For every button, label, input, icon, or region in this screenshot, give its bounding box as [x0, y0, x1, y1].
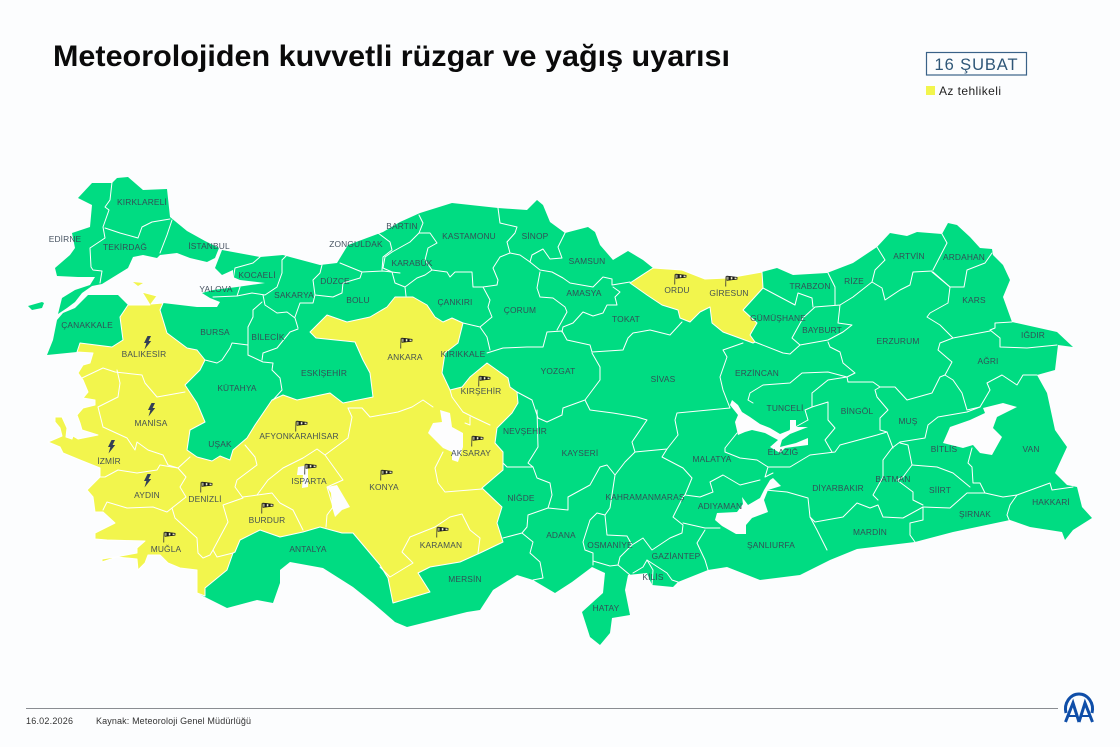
province name labels: HAKKARİ	[1032, 497, 1070, 507]
icon: wind Isparta	[304, 464, 316, 474]
province name labels: TUNCELİ	[767, 403, 803, 413]
province name labels: SİNOP	[522, 231, 549, 241]
region: Thrace	[55, 177, 219, 314]
icon: wind Giresun	[725, 276, 737, 286]
province name labels: ÇANKIRI	[437, 297, 473, 307]
province name labels: BİLECİK	[251, 332, 285, 342]
province name labels: VAN	[1022, 444, 1040, 454]
icon: wind Afyonkarahisar	[295, 421, 307, 432]
province name labels: YALOVA	[199, 284, 233, 294]
region: Ordu and Giresun	[630, 268, 763, 343]
province name labels: ADIYAMAN	[698, 501, 742, 511]
province name labels	[49, 197, 1070, 613]
province name labels: TOKAT	[612, 314, 640, 324]
province borders	[82, 182, 1073, 585]
province name labels: KARABÜK	[391, 258, 433, 268]
lake: Eğirdir	[297, 465, 308, 488]
province name labels: MANİSA	[134, 418, 168, 428]
province name labels: AĞRI	[977, 356, 999, 366]
province name labels: ŞANLIURFA	[747, 540, 795, 550]
province name labels: GAZİANTEP	[652, 551, 701, 561]
province name labels: SAMSUN	[569, 256, 605, 266]
map: Turkey provinces	[28, 177, 1092, 645]
province name labels: KİLİS	[642, 572, 664, 582]
date badge	[926, 52, 1026, 75]
province name labels: ANKARA	[387, 352, 423, 362]
lake: Atatürk	[715, 478, 781, 534]
province name labels: TRABZON	[789, 281, 831, 291]
province name labels: BOLU	[346, 295, 370, 305]
icon: lightning Balıkesir	[144, 336, 151, 350]
lake: Van	[943, 403, 1017, 455]
province name labels: İSTANBUL	[188, 241, 230, 251]
province name labels: ŞIRNAK	[959, 509, 991, 519]
province name labels: RİZE	[844, 276, 864, 286]
province name labels: UŞAK	[208, 439, 232, 449]
province name labels: KIRIKKALE	[441, 349, 486, 359]
footer date: 16.02.2026	[26, 716, 73, 726]
province name labels: MALATYA	[693, 454, 732, 464]
province name labels: ÇORUM	[504, 305, 536, 315]
province name labels: DİYARBAKIR	[812, 483, 864, 493]
province name labels: SAKARYA	[274, 290, 314, 300]
lakes	[297, 400, 1017, 534]
province name labels: ARTVİN	[893, 251, 925, 261]
province name labels: BAYBURT	[802, 325, 842, 335]
province name labels: GÜMÜŞHANE	[750, 313, 806, 323]
province name labels: BATMAN	[875, 474, 911, 484]
province name labels: MUĞLA	[151, 544, 182, 554]
province name labels: KARAMAN	[420, 540, 462, 550]
province name labels: İZMİR	[97, 456, 121, 466]
province name labels: AYDIN	[134, 490, 160, 500]
province name labels: KONYA	[369, 482, 399, 492]
province name labels: AKSARAY	[451, 448, 491, 458]
province name labels: ORDU	[664, 285, 690, 295]
province name labels: ERZURUM	[877, 336, 919, 346]
province name labels: MARDİN	[853, 527, 887, 537]
province name labels: NİĞDE	[507, 493, 535, 503]
province name labels: KARS	[962, 295, 986, 305]
province name labels: DENİZLİ	[188, 494, 222, 504]
province name labels: BALIKESİR	[122, 349, 166, 359]
province name labels: ISPARTA	[291, 476, 327, 486]
province name labels: KOCAELİ	[238, 270, 276, 280]
province name labels: KIRŞEHİR	[461, 386, 501, 396]
icon: lightning Manisa	[148, 403, 155, 416]
province name labels: KAHRAMANMARAŞ	[605, 492, 685, 502]
province name labels: SİVAS	[651, 374, 676, 384]
icon: wind Muğla	[163, 532, 175, 542]
province name labels: EDİRNE	[49, 234, 82, 244]
province name labels: AFYONKARAHİSAR	[259, 431, 339, 441]
legend: Az tehlikeli	[939, 84, 1001, 98]
province name labels: ARDAHAN	[943, 252, 985, 262]
icon: wind Aksaray	[471, 436, 483, 446]
province name labels: BURSA	[200, 327, 230, 337]
province name labels: BİTLİS	[931, 444, 958, 454]
island: Gökçeada	[28, 302, 44, 310]
province name labels: BİNGÖL	[841, 406, 873, 416]
icon: wind Denizli	[200, 482, 212, 492]
icon: wind Kırşehir	[478, 376, 490, 386]
wind icons	[163, 274, 737, 542]
lake: Beyşehir	[327, 485, 350, 517]
province name labels: NEVŞEHİR	[503, 426, 547, 436]
province name labels: GİRESUN	[709, 288, 749, 298]
province name labels: ZONGULDAK	[329, 239, 383, 249]
province name labels: HATAY	[593, 603, 620, 613]
province name labels: SİİRT	[929, 485, 951, 495]
region: Anatolia green base	[47, 200, 1092, 645]
icon: AA logo	[1066, 694, 1092, 722]
icon: wind Konya	[380, 470, 392, 480]
lake: Keban	[730, 400, 808, 453]
province name labels: KAYSERİ	[562, 448, 598, 458]
footer rule	[26, 708, 1058, 710]
province name labels: ELAZIĞ	[768, 447, 798, 457]
province name labels: IĞDIR	[1021, 330, 1045, 340]
icon: lightning Aydın	[144, 474, 151, 488]
province name labels: ADANA	[546, 530, 576, 540]
icon: wind Karaman	[436, 527, 448, 538]
region: western yellow warning area	[48, 292, 518, 603]
footer source: Kaynak: Meteoroloji Genel Müdürlüğü	[96, 716, 251, 726]
island: Marmara	[133, 282, 143, 286]
province name labels: ANTALYA	[289, 544, 327, 554]
province name labels: ÇANAKKALE	[61, 320, 113, 330]
province name labels: BURDUR	[249, 515, 285, 525]
date badge: 16 ŞUBAT	[935, 56, 1018, 74]
icon: wind Ordu	[674, 274, 686, 284]
icon: lightning İzmir	[108, 440, 115, 454]
province name labels: YOZGAT	[541, 366, 575, 376]
province name labels: MUŞ	[898, 416, 918, 426]
province name labels: TEKİRDAĞ	[103, 242, 147, 252]
province name labels: KÜTAHYA	[217, 383, 257, 393]
province name labels: DÜZCE	[320, 276, 350, 286]
province name labels: BARTIN	[386, 221, 418, 231]
province name labels: OSMANİYE	[587, 540, 633, 550]
icon: wind Burdur	[261, 503, 273, 514]
province name labels: MERSİN	[448, 574, 482, 584]
icon: wind Ankara	[400, 338, 412, 348]
province name labels: ESKİŞEHİR	[301, 368, 347, 378]
province name labels: AMASYA	[566, 288, 602, 298]
province name labels: ERZİNCAN	[735, 368, 779, 378]
title: Meteorolojiden kuvvetli rüzgar ve yağış uyarısı	[53, 40, 730, 73]
province name labels: KIRKLARELİ	[117, 197, 167, 207]
lake: Tuz	[428, 410, 463, 462]
province name labels: KASTAMONU	[442, 231, 496, 241]
lightning icons	[108, 336, 155, 488]
